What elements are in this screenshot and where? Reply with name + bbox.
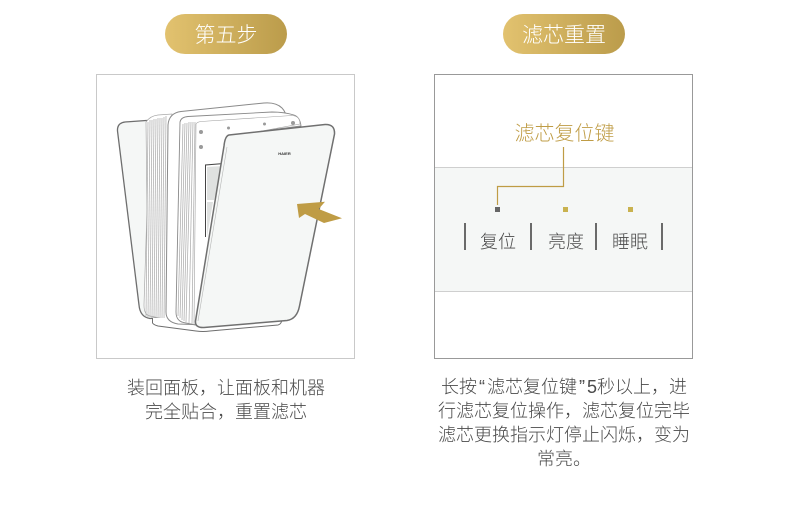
button labels: 睡眠 (612, 232, 648, 252)
screws (199, 121, 295, 149)
caption: filter reset: 常亮。 (537, 449, 591, 469)
front panel (195, 124, 335, 328)
brand mark: HAIER (278, 151, 291, 156)
caption: filter reset: 滤芯更换指示灯停止闪烁，变为 (438, 425, 690, 445)
filter stack left (144, 114, 172, 320)
button dividers (464, 223, 663, 250)
heading pill: step five: 第五步 (194, 24, 258, 47)
indicator lights (495, 207, 633, 212)
caption: filter reset: 行滤芯复位操作，滤芯复位完毕 (438, 401, 690, 421)
caption: step five: 装回面板，让面板和机器 (127, 378, 325, 398)
inner filter edges (178, 122, 195, 324)
leader line (498, 147, 564, 205)
button labels: 亮度 (548, 232, 584, 252)
heading pill: step five (165, 14, 287, 54)
label: reset key: 滤芯复位键 (514, 122, 614, 145)
button labels (480, 232, 648, 252)
caption: step five: 完全贴合，重置滤芯 (145, 402, 307, 422)
base plate (152, 318, 282, 332)
heading pill: filter reset: 滤芯重置 (522, 24, 606, 47)
button labels: 复位 (480, 232, 516, 252)
caption: filter reset: 长按“滤芯复位键”5秒以上，进 (441, 377, 687, 397)
caption: step five (127, 378, 325, 422)
caption: filter reset (438, 377, 690, 469)
filter window (206, 164, 224, 237)
arrow (297, 202, 342, 223)
heading pill: filter reset (503, 14, 625, 54)
frame plate (194, 116, 300, 326)
rear panel (117, 120, 160, 318)
main purifier body (166, 103, 287, 325)
control strip (435, 167, 692, 292)
